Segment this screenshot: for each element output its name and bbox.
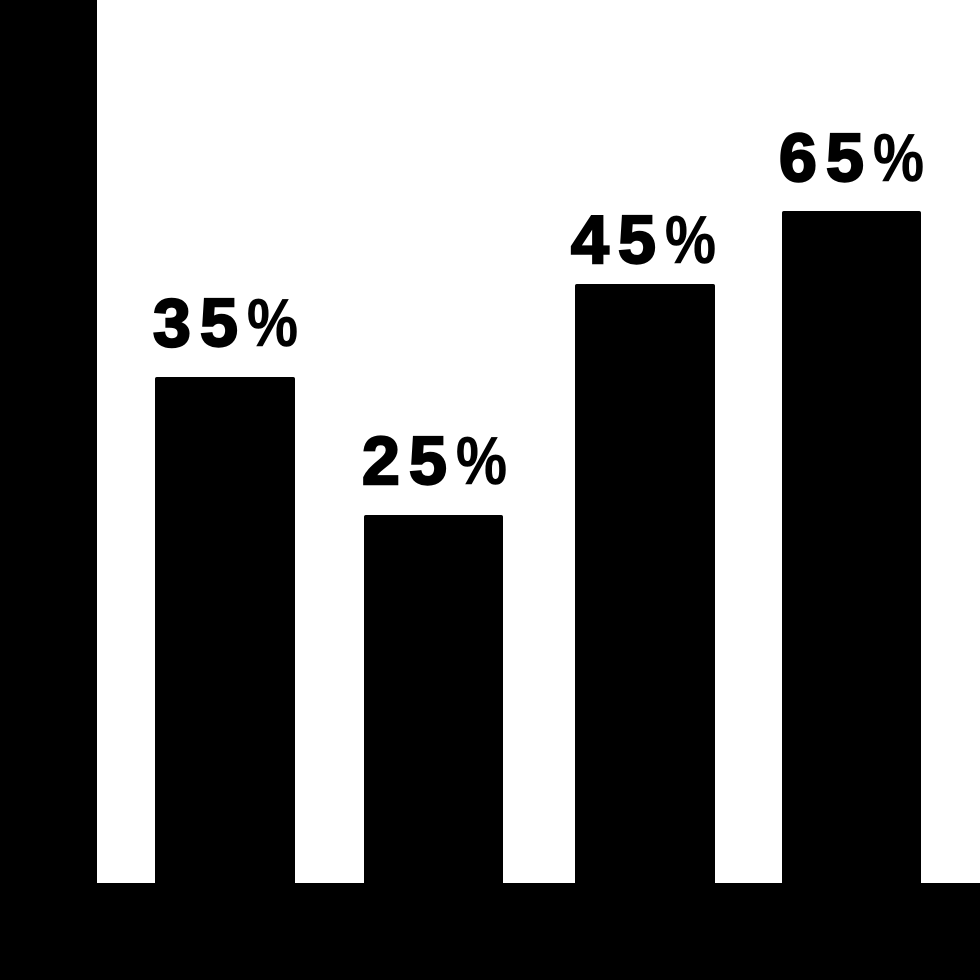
label 65% — [779, 120, 924, 196]
label 35%: % — [247, 285, 298, 361]
label 35%: 35 — [153, 285, 238, 361]
bar 25% — [364, 515, 503, 887]
label 25%: % — [456, 423, 507, 499]
label 65%: 65 — [779, 120, 864, 196]
vertical axis — [0, 0, 97, 980]
label 35% — [153, 285, 298, 361]
horizontal axis — [0, 883, 980, 980]
label 25% — [362, 423, 507, 499]
bar 45% — [575, 284, 715, 887]
label 65%: % — [873, 120, 924, 196]
label 45% — [571, 202, 716, 278]
label 45%: 45 — [571, 202, 656, 278]
label 25%: 25 — [362, 423, 447, 499]
label 45%: % — [665, 202, 716, 278]
bar 35% — [155, 377, 295, 887]
bar 65% — [782, 211, 921, 887]
